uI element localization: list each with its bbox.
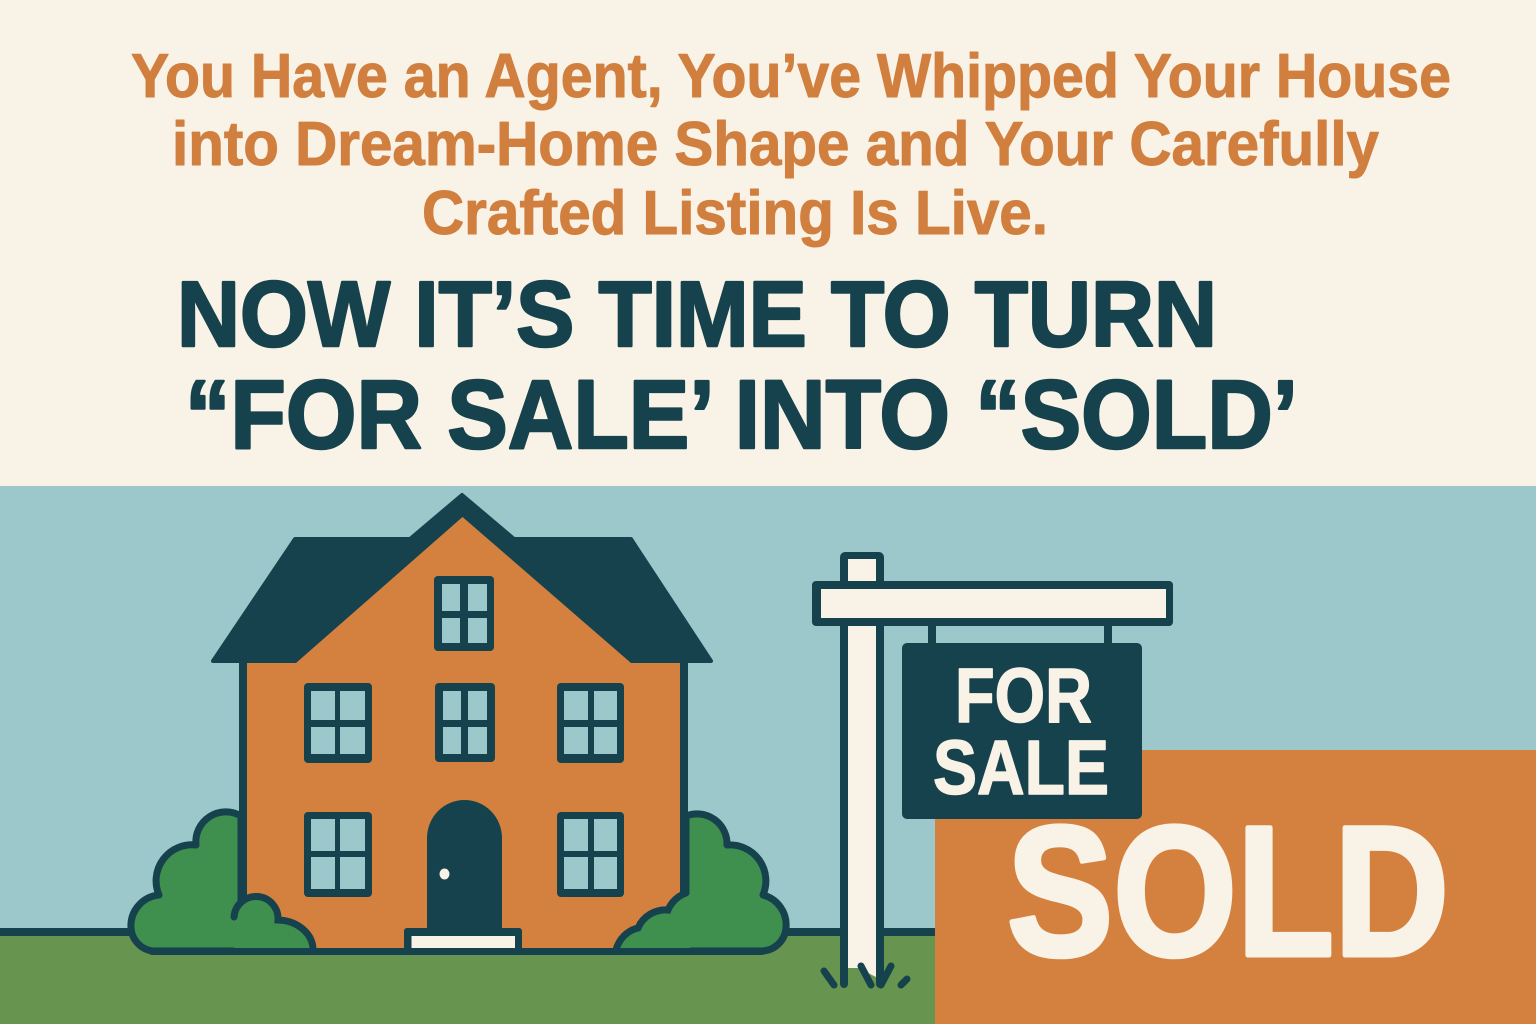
ground outline under house <box>152 948 762 955</box>
post <box>840 552 884 984</box>
crossbar <box>812 581 1173 626</box>
middle left window <box>304 683 372 763</box>
roof <box>213 495 711 661</box>
grass tufts <box>824 966 907 985</box>
subtitle: orange three-line heading: into Dream-Home Shape and Your Carefully <box>172 110 1379 179</box>
subtitle: orange three-line heading: Crafted Listing Is Live. <box>422 179 1048 248</box>
icon: sign post <box>812 552 1173 985</box>
gable window <box>434 576 494 651</box>
for sale board: SALE <box>933 725 1109 811</box>
left front bush <box>234 896 313 950</box>
right back bush <box>686 814 786 951</box>
left back bush <box>131 812 241 951</box>
title: navy headline: “FOR SALE’ INTO “SOLD’ <box>185 360 1298 469</box>
subtitle: orange three-line heading <box>131 42 1451 248</box>
title: navy headline: NOW IT’S TIME TO TURN <box>177 262 1217 366</box>
title: navy headline <box>177 262 1298 469</box>
sold panel <box>935 750 1536 1024</box>
right front bush <box>616 893 690 950</box>
middle right window <box>557 683 624 763</box>
for sale board <box>902 643 1142 819</box>
middle centre window <box>435 683 495 762</box>
lower right window <box>557 812 624 897</box>
hangers <box>932 626 1108 643</box>
for sale board: FOR <box>955 653 1092 739</box>
sky background panel <box>0 486 1536 1024</box>
house wall <box>243 655 684 950</box>
subtitle: orange three-line heading: You Have an Agent, You’ve Whipped Your House <box>131 42 1451 111</box>
door <box>427 800 502 930</box>
icon: house with bushes <box>131 495 786 952</box>
door knob <box>440 868 450 880</box>
lower left window <box>304 812 372 897</box>
sold label: SOLD <box>1007 789 1449 995</box>
grass and horizon line <box>0 928 936 1024</box>
wall outlines <box>243 655 684 908</box>
doorstep <box>404 928 522 952</box>
gable front <box>247 517 680 700</box>
